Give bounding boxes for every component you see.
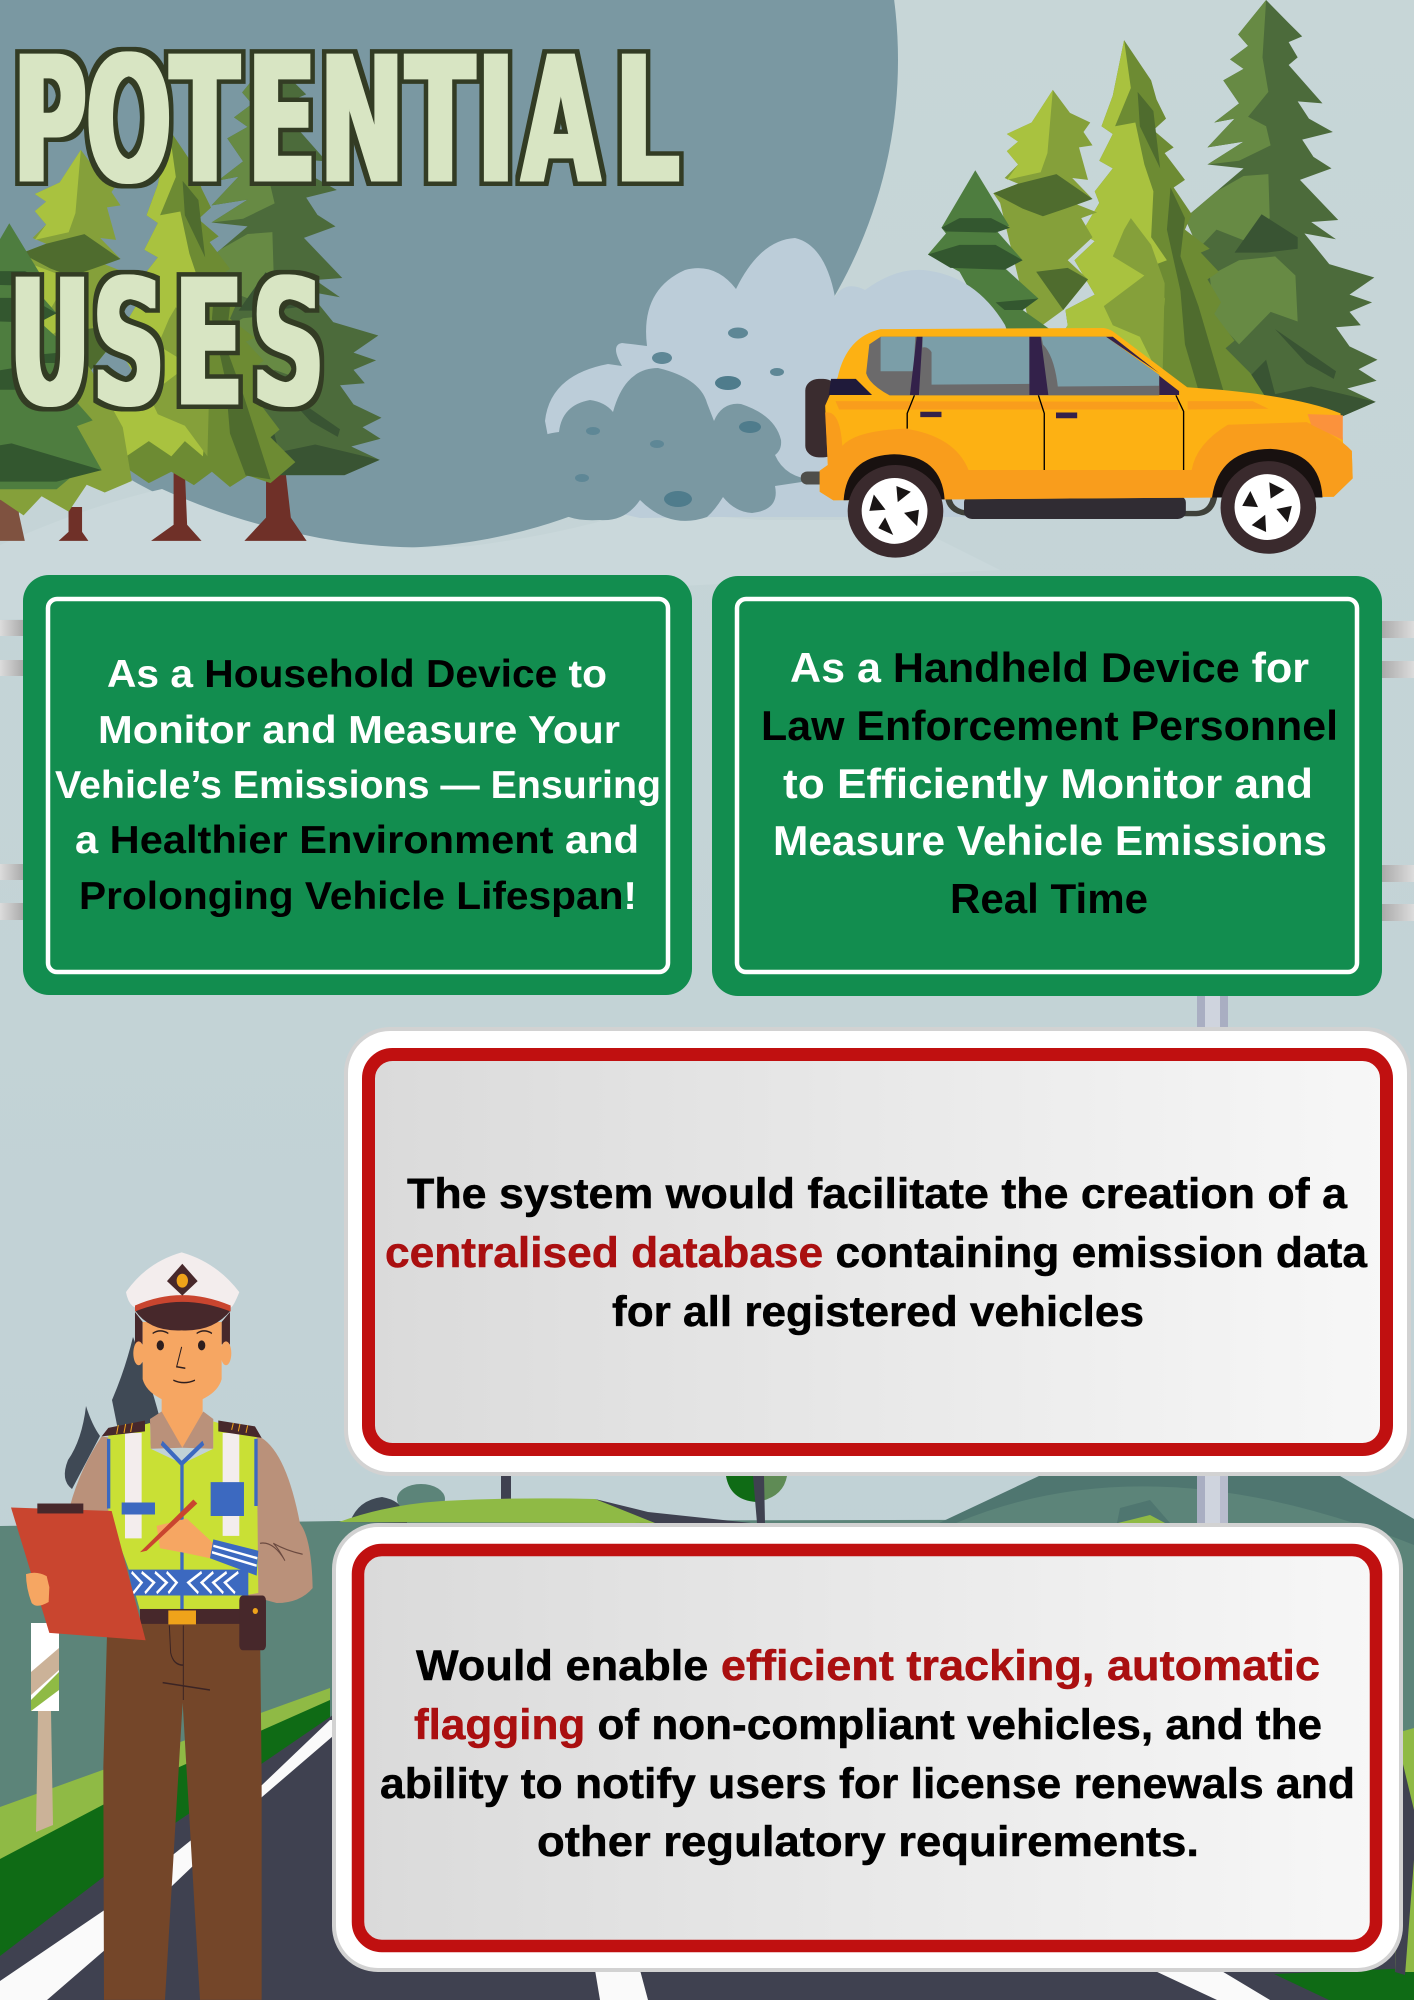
right road streak bbox=[1395, 1760, 1414, 1975]
front wheel bbox=[1221, 461, 1316, 554]
household device text: Monitor and Measure Your bbox=[98, 709, 620, 752]
large smoke specks bbox=[664, 376, 761, 507]
grass verge bbox=[0, 1688, 330, 1900]
left mountain small peak bbox=[65, 1406, 100, 1489]
left hand fingers bbox=[26, 1573, 49, 1606]
red frame bbox=[368, 1054, 1386, 1450]
door handles bbox=[920, 412, 1077, 418]
belt bbox=[140, 1609, 240, 1624]
database text bbox=[385, 1170, 1368, 1336]
clipboard clip bbox=[37, 1504, 83, 1513]
tracking text bbox=[380, 1642, 1355, 1866]
left mountain peak bbox=[112, 1337, 160, 1440]
dark pine bbox=[189, 58, 381, 475]
tracking text: Would enable efficient tracking, automatic bbox=[416, 1642, 1320, 1690]
bright pine bbox=[77, 129, 295, 487]
left sign brackets bbox=[0, 620, 24, 920]
small pine shadows bbox=[928, 218, 1038, 310]
spare tyre bbox=[805, 379, 837, 457]
dark pine highlights bbox=[1185, 0, 1298, 344]
sign inner border bbox=[48, 599, 668, 972]
rear light panel bbox=[829, 379, 872, 395]
bright pine bbox=[1032, 40, 1266, 425]
wheel arches bbox=[844, 449, 1322, 500]
sign inner border bbox=[737, 599, 1357, 972]
bright pine light side bbox=[1032, 40, 1167, 406]
vest reflective strips bbox=[125, 1433, 239, 1538]
shirt left arm bbox=[70, 1436, 117, 1518]
dark smoke bbox=[525, 368, 815, 521]
mid pine shadows bbox=[993, 174, 1093, 310]
panel: handheld device green sign bbox=[712, 576, 1382, 996]
dark pine shadows bbox=[1235, 214, 1376, 417]
side stripes bbox=[836, 401, 1268, 409]
cap visor bbox=[135, 1301, 231, 1331]
tree trunks bbox=[0, 451, 307, 541]
neck bbox=[162, 1394, 203, 1448]
household device text: Prolonging Vehicle Lifespan ! bbox=[79, 875, 637, 918]
collar bbox=[150, 1411, 213, 1449]
red frame bbox=[358, 1550, 1376, 1946]
mid pine bbox=[993, 90, 1097, 333]
handheld device text: Law Enforcement Personnel bbox=[761, 702, 1338, 749]
left tree cluster bbox=[0, 58, 381, 541]
right hand bbox=[157, 1518, 213, 1558]
household device text: a Healthier Environment and bbox=[75, 819, 639, 862]
bright pine mid tone bbox=[1104, 218, 1165, 383]
window frame bbox=[866, 337, 1159, 395]
handheld device text bbox=[761, 644, 1338, 922]
small tree canopy bbox=[726, 1476, 756, 1502]
handheld device text: Real Time bbox=[950, 875, 1148, 922]
distant road bbox=[595, 1499, 751, 1523]
roadside marker post bbox=[31, 1623, 59, 1832]
bright pine shadow bbox=[1138, 92, 1226, 398]
handheld device text: to Efficiently Monitor and bbox=[783, 760, 1313, 807]
trousers bbox=[103, 1623, 262, 2000]
mid pine bbox=[0, 150, 132, 515]
title bbox=[9, 20, 679, 446]
right mountain lighter face bbox=[956, 1486, 1414, 1740]
tracking text: flagging of non-compliant vehicles, and the bbox=[414, 1701, 1322, 1749]
handheld device text: As a Handheld Device for bbox=[790, 644, 1309, 691]
pale smoke bbox=[545, 238, 1040, 518]
sleeve crease bbox=[260, 1543, 303, 1561]
green knoll bbox=[339, 1498, 655, 1523]
right tree cluster bbox=[928, 0, 1377, 425]
trouser lines bbox=[163, 1625, 210, 1700]
underbody bbox=[964, 496, 1186, 519]
teal boulder bbox=[397, 1484, 445, 1514]
headlight bbox=[1308, 414, 1343, 440]
car body bbox=[820, 328, 1353, 500]
small tree trunk bbox=[753, 1476, 765, 1523]
shirt right arm bbox=[240, 1431, 313, 1603]
vest chevron band bbox=[128, 1570, 248, 1596]
darker orange arches bbox=[820, 412, 1353, 500]
cap crown bbox=[126, 1252, 239, 1308]
small green pine bbox=[0, 223, 102, 489]
tracking text: ability to notify users for license renewals and bbox=[380, 1760, 1355, 1808]
brackets bbox=[948, 496, 1214, 514]
hair bbox=[135, 1312, 230, 1344]
right mountain bbox=[900, 1476, 1414, 1620]
large blue-grey sun disc bbox=[0, 0, 898, 548]
small tree canopy shade bbox=[756, 1476, 787, 1502]
household device text: As a Household Device to bbox=[107, 653, 607, 696]
high-visibility vest bbox=[108, 1421, 258, 1610]
database text: centralised database containing emission data bbox=[385, 1229, 1368, 1277]
cap emblem bbox=[167, 1264, 198, 1296]
exhaust pipe bbox=[801, 471, 828, 484]
windows bbox=[881, 337, 1159, 387]
mound grass bbox=[1118, 1515, 1165, 1523]
title line: uses: USES bbox=[9, 243, 325, 446]
centre sign pole bbox=[1197, 990, 1228, 1528]
face bbox=[143, 1322, 222, 1407]
rear wheel bbox=[848, 465, 943, 558]
vest pockets bbox=[122, 1482, 244, 1516]
tracking text: other regulatory requirements. bbox=[537, 1818, 1199, 1866]
smoke specks bbox=[575, 328, 784, 482]
exhaust smoke cloud bbox=[525, 238, 1040, 521]
right grass edge bbox=[1395, 1728, 1414, 1972]
database text: The system would facilitate the creation of a bbox=[407, 1170, 1348, 1218]
epaulettes bbox=[102, 1420, 262, 1438]
door lines bbox=[907, 395, 1184, 470]
clipboard bbox=[11, 1507, 146, 1640]
panel: household device green sign bbox=[23, 575, 692, 995]
road bbox=[0, 1600, 1414, 2000]
right dark green verge bbox=[1274, 1968, 1414, 2000]
orange SUV car bbox=[801, 328, 1353, 558]
panel: efficient tracking sign bbox=[334, 1525, 1401, 1970]
household device text bbox=[55, 653, 661, 918]
teal hills bbox=[0, 1519, 1414, 2000]
distant post bbox=[501, 1476, 511, 1502]
pen bbox=[140, 1500, 197, 1552]
cap band bbox=[135, 1295, 231, 1312]
striped cuff bbox=[210, 1539, 258, 1576]
distant mound bbox=[1117, 1500, 1170, 1523]
dark green verge bbox=[0, 1700, 330, 1980]
belt buckle bbox=[168, 1610, 196, 1624]
small green pine bbox=[928, 170, 1050, 344]
right lane line bbox=[1153, 1970, 1270, 2000]
database text: for all registered vehicles bbox=[612, 1288, 1144, 1336]
dark rock bbox=[350, 1497, 407, 1523]
dark pine bbox=[1185, 0, 1377, 417]
left road lane line bbox=[0, 1720, 340, 2000]
lower landscape bbox=[0, 1337, 1414, 2000]
title line: potential: POTENTIAL bbox=[13, 20, 679, 223]
pale snowy hill bbox=[0, 489, 1000, 620]
handheld device text: Measure Vehicle Emissions bbox=[773, 817, 1327, 864]
mid pine highlights bbox=[1007, 90, 1053, 180]
ears bbox=[133, 1341, 144, 1365]
centre lane dash bbox=[595, 1970, 648, 2000]
belt pouch bbox=[239, 1596, 266, 1650]
pillars bbox=[910, 337, 1179, 395]
household device text: Vehicle’s Emissions — Ensuring bbox=[55, 764, 661, 807]
right sign brackets bbox=[1381, 621, 1414, 921]
vest blue trim bbox=[109, 1439, 256, 1610]
facial features bbox=[153, 1331, 212, 1383]
traffic police officer bbox=[11, 1252, 313, 2000]
panel: centralised database sign bbox=[346, 1029, 1409, 1474]
